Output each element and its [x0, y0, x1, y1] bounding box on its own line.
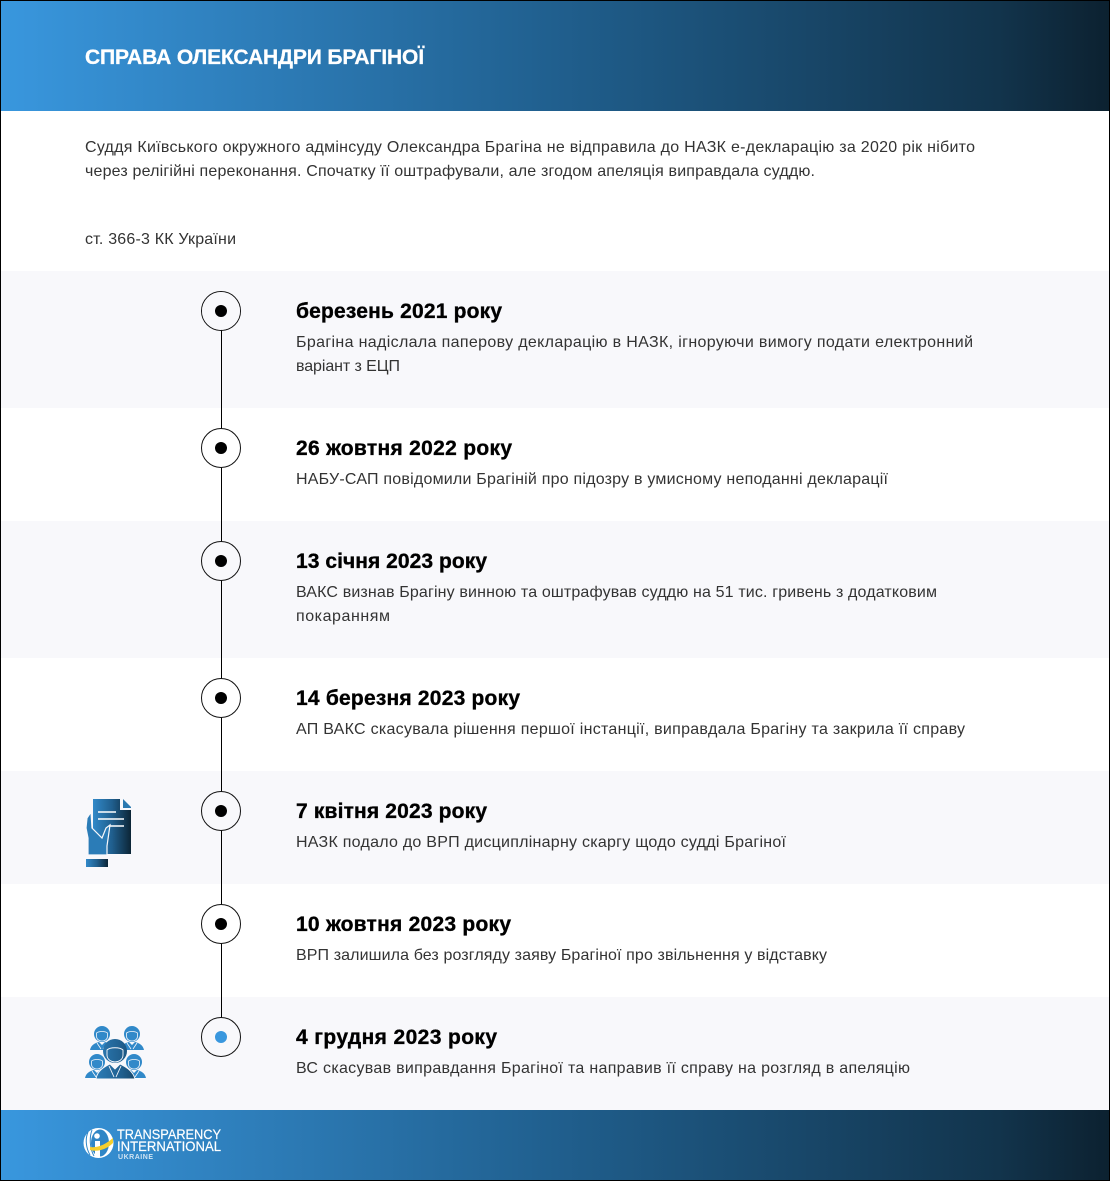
logo: Transparency International Ukraine: TRANSPARENCY: [117, 1126, 222, 1142]
timeline event: March 2021: [202, 292, 973, 375]
timeline event: 26 October 2022: НАБУ-САП повідомили Брагіній про підозру в умисному неподанні декларації: [296, 471, 889, 488]
legal article reference: ст. 366-3 КК України: [85, 231, 236, 248]
icon: group of people: [85, 1026, 146, 1079]
header banner: [1, 1, 1109, 111]
timeline event: 26 October 2022: 26 жовтня 2022 року: [296, 437, 512, 460]
logo: Transparency International Ukraine: INTERNATIONAL: [117, 1138, 221, 1154]
intro text: [85, 139, 975, 180]
timeline row backgrounds: [1, 271, 1109, 1110]
timeline event: 7 April 2023: НАЗК подало до ВРП дисциплінарну скаргу щодо судді Брагіної: [296, 834, 787, 851]
timeline event: 4 December 2023: [202, 1018, 910, 1077]
timeline event: 14 March 2023: 14 березня 2023 року: [296, 687, 520, 710]
timeline vertical line: [220, 311, 222, 1037]
intro text: через релігійні переконання. Спочатку її оштрафували, але згодом апеляція виправдала суддю.: [85, 163, 815, 180]
title: СПРАВА ОЛЕКСАНДРИ БРАГІНОЇ: [85, 46, 425, 69]
timeline event: 13 January 2023: ВАКС визнав Брагіну винною та оштрафував суддю на 51 тис. гривень з додатковим: [296, 584, 937, 601]
timeline event: 10 October 2023: ВРП залишила без розгляду заяву Брагіної про звільнення у відставку: [296, 947, 827, 964]
timeline event: March 2021: варіант з ЕЦП: [296, 358, 400, 375]
timeline event: 26 October 2022: [202, 428, 889, 488]
timeline event: 13 January 2023: [202, 542, 937, 625]
timeline event: 7 April 2023: [202, 792, 787, 851]
icon: hand holding document: [86, 799, 131, 867]
timeline event: March 2021: Брагіна надіслала паперову декларацію в НАЗК, ігноруючи вимогу подати електронний: [296, 334, 973, 351]
timeline event: 13 January 2023: покаранням: [296, 608, 390, 625]
timeline event: 14 March 2023: [202, 678, 965, 738]
timeline event: 10 October 2023: [202, 904, 827, 964]
timeline event: 13 January 2023: 13 січня 2023 року: [296, 550, 487, 573]
timeline event: 7 April 2023: 7 квітня 2023 року: [296, 800, 487, 823]
logo: Transparency International Ukraine: [84, 1126, 222, 1161]
logo: Transparency International Ukraine: UKRAINE: [118, 1154, 153, 1161]
timeline event: 10 October 2023: 10 жовтня 2023 року: [296, 913, 511, 936]
timeline event: 4 December 2023: 4 грудня 2023 року: [296, 1026, 497, 1049]
timeline event: 4 December 2023: ВС скасував виправдання Брагіної та направив її справу на розгляд в апеляцію: [296, 1060, 910, 1077]
intro text: Суддя Київського окружного адмінсуду Олександра Брагіна не відправила до НАЗК е-декларацію за 2020 рік нібито: [85, 139, 975, 156]
footer banner: [1, 1110, 1109, 1180]
timeline event: March 2021: березень 2021 року: [296, 300, 502, 323]
timeline event: 14 March 2023: АП ВАКС скасувала рішення першої інстанції, виправдала Брагіну та закрила її справу: [296, 721, 965, 738]
